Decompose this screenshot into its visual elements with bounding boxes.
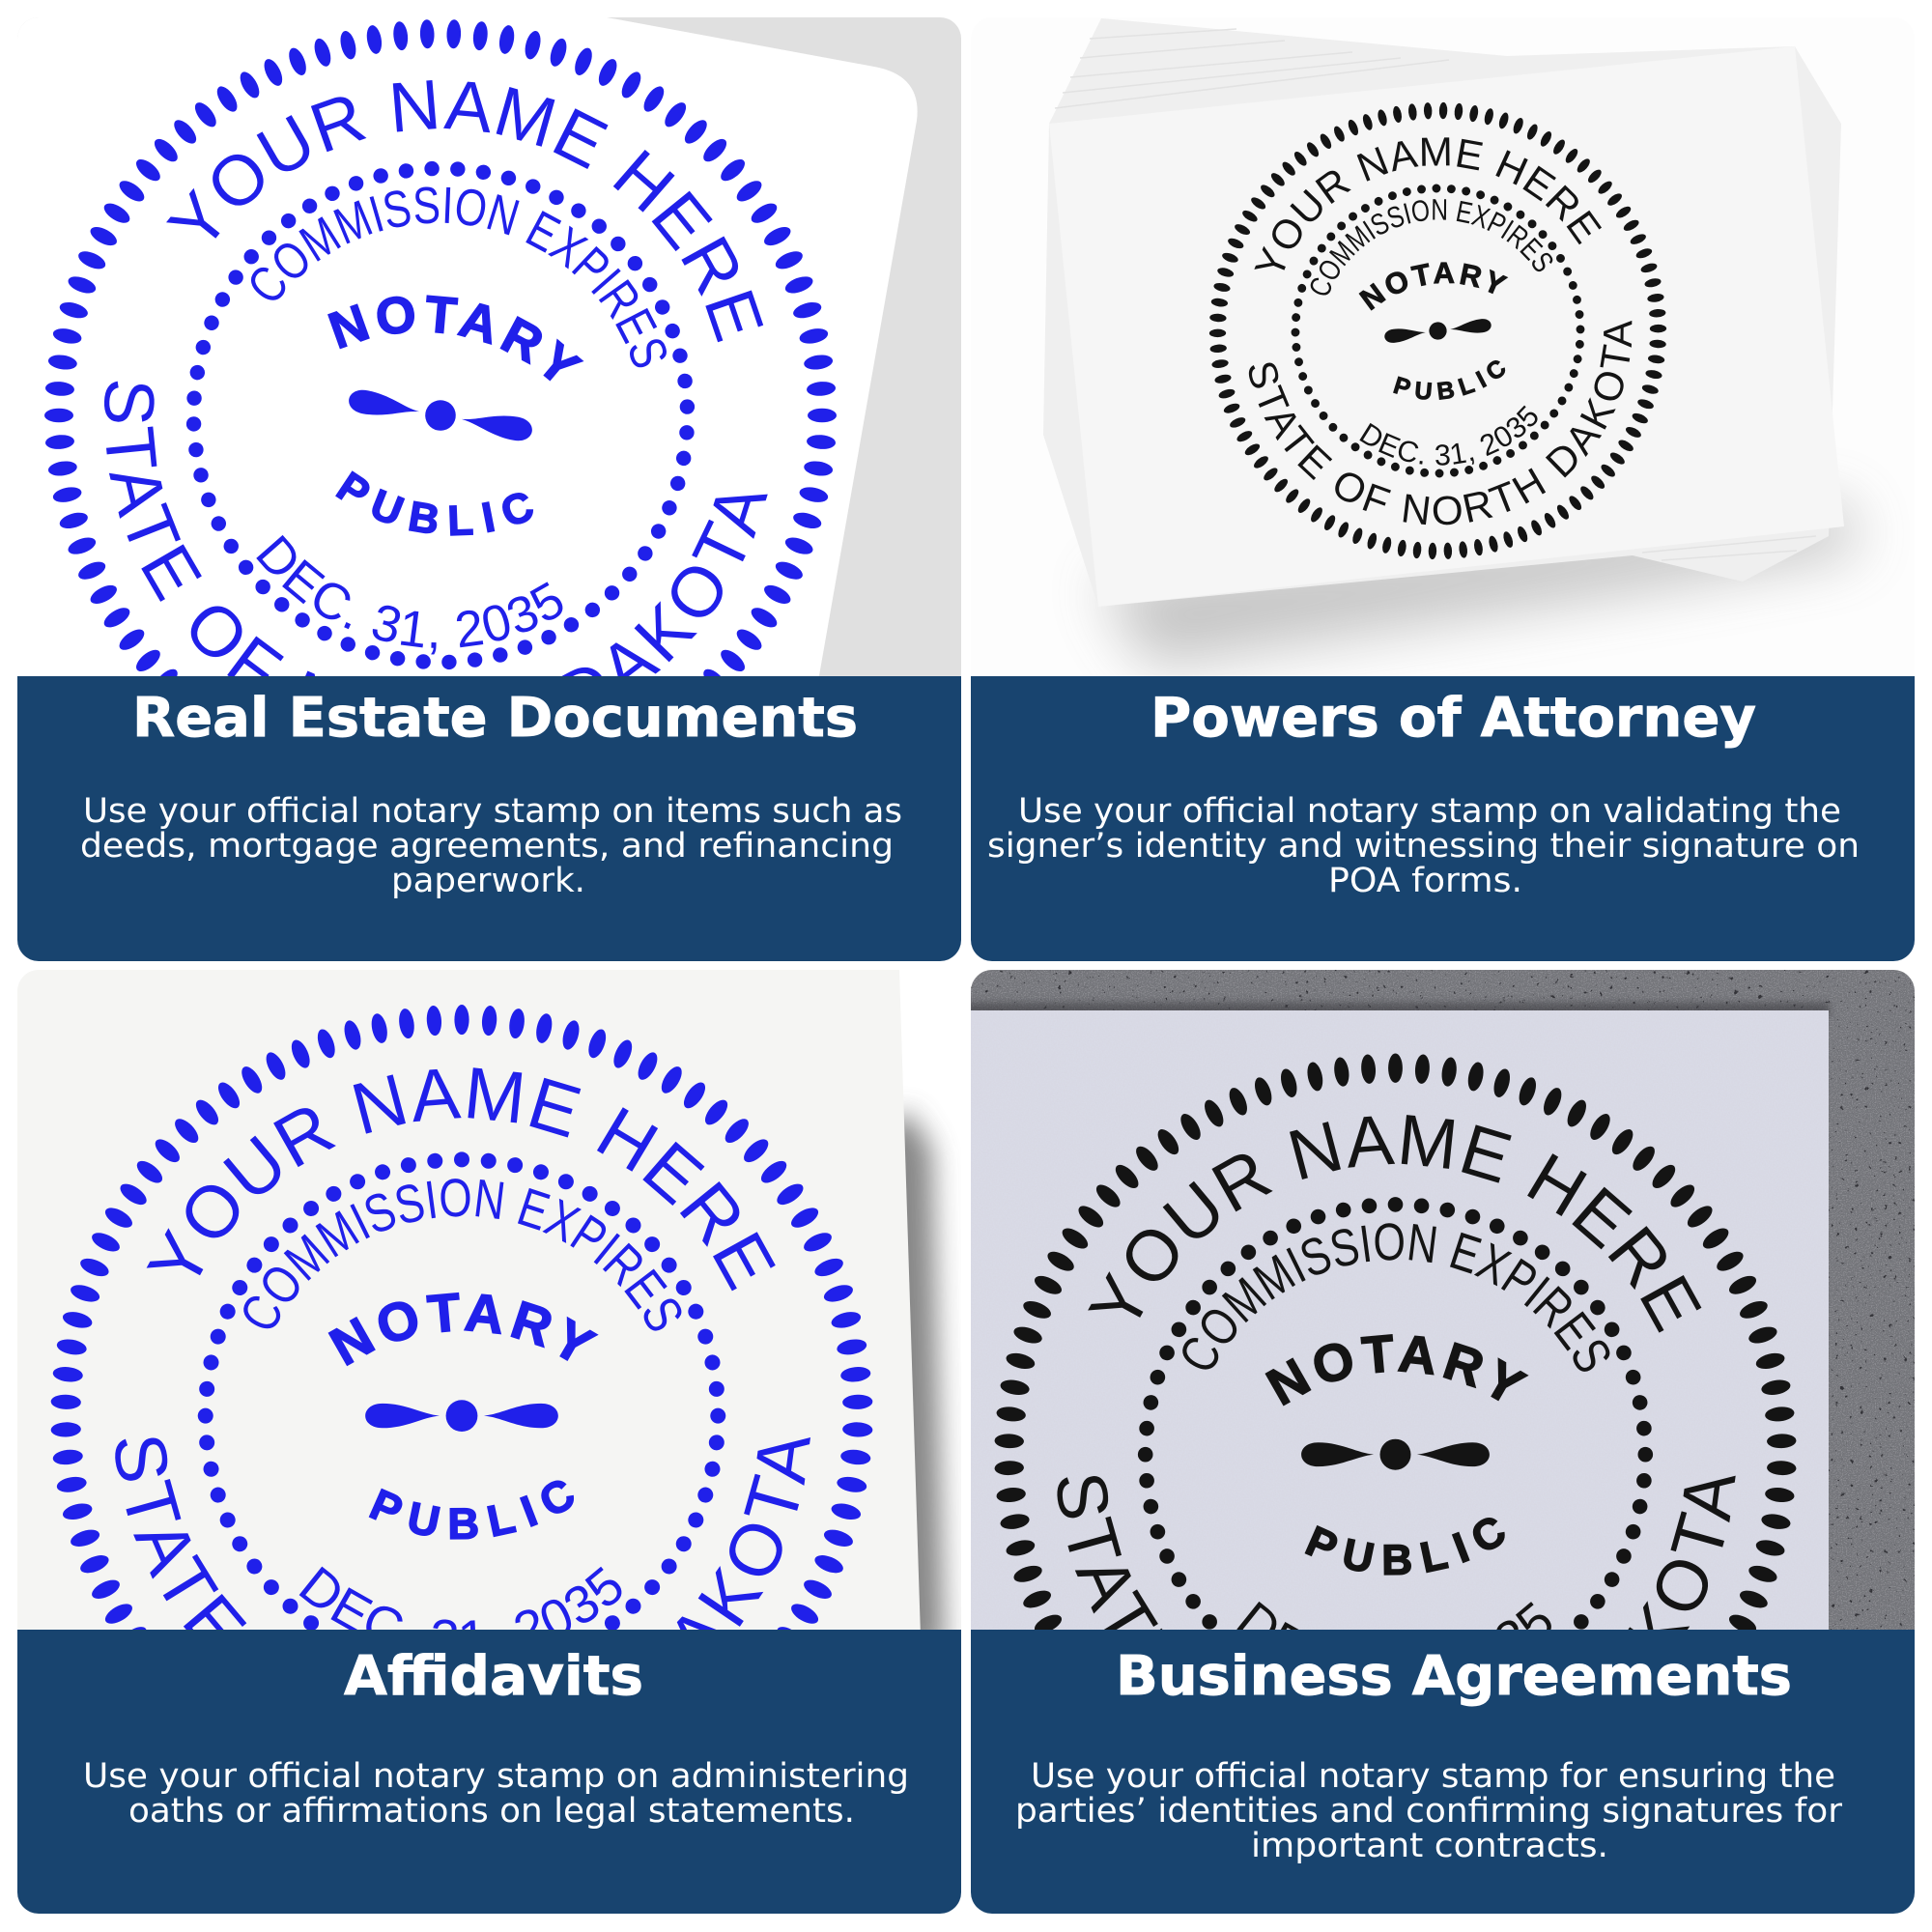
photo background: paper with side shadow (17, 970, 961, 1652)
description: important contracts. (1251, 1827, 1608, 1865)
heading: Real Estate Documents (132, 687, 858, 750)
notary stamp: black: NOTARY (1258, 1324, 1533, 1417)
notary stamp: black: STATE OF NORTH DAKOTA (1248, 321, 1633, 526)
notary stamp: blue: STATE OF NORTH DAKOTA (115, 1437, 810, 1630)
description: Use your official notary stamp on items such as (83, 792, 902, 831)
notary stamp: blue: STATE OF NORTH DAKOTA (104, 381, 768, 676)
notary stamp: black: COMMISSION EXPIRES (1310, 199, 1553, 296)
description: paperwork. (391, 862, 585, 900)
photo background: stack of white cards (1043, 18, 1879, 676)
heading: Affidavits (344, 1645, 643, 1708)
description: signer’s identity and witnessing their signature on (987, 827, 1860, 866)
notary stamp: blue: YOUR NAME HERE (147, 1067, 776, 1291)
notary stamp: blue: PUBLIC (335, 470, 533, 536)
heading: Business Agreements (1116, 1645, 1792, 1708)
notary stamp: blue: PUBLIC (369, 1480, 574, 1540)
description (1015, 1757, 1843, 1865)
notary stamp: black: PUBLIC (1299, 1507, 1514, 1584)
description: Use your official notary stamp on validating the (1018, 792, 1841, 831)
panel: powers of attorney (971, 18, 1915, 961)
notary stamp: blue: NOTARY (328, 1293, 599, 1366)
panel: affidavits (17, 970, 961, 1914)
notary stamp: black: NOTARY (1358, 262, 1509, 311)
notary stamp: blue: YOUR NAME HERE (166, 80, 763, 342)
description: parties’ identities and confirming signatures for (1015, 1792, 1843, 1831)
description: oaths or affirmations on legal statements. (128, 1792, 855, 1831)
notary stamp: black: PUBLIC (1393, 360, 1505, 400)
panel: business agreements (971, 970, 1915, 1914)
notary stamp: blue: COMMISSION EXPIRES (243, 1179, 682, 1331)
notary stamp: black (995, 1053, 1797, 1630)
notary stamp: black: YOUR NAME HERE (1254, 137, 1602, 270)
photo background: paper on concrete (966, 970, 1915, 1636)
caption panel: business agreements (971, 1630, 1915, 1914)
notary stamp: black (1209, 102, 1667, 560)
notary stamp: black: STATE OF NORTH DAKOTA (1057, 1476, 1736, 1630)
photo background: paper corner on grey (607, 17, 961, 676)
description: POA forms. (1328, 862, 1522, 900)
description (80, 792, 902, 900)
caption panel: real estate documents (17, 676, 961, 961)
notary stamp: blue: DEC. 31, 2035 (256, 535, 562, 655)
panel: real estate documents (17, 17, 961, 961)
notary stamp: black: YOUR NAME HERE (1088, 1115, 1702, 1333)
description: Use your official notary stamp on administering (83, 1757, 909, 1796)
description (989, 796, 1857, 893)
description: deeds, mortgage agreements, and refinancing (80, 827, 894, 866)
notary stamp: blue: COMMISSION EXPIRES (251, 187, 667, 367)
notary stamp: blue: DEC. 31, 2035 (299, 1567, 622, 1630)
notary stamp: black: DEC. 31, 2035 (1226, 1590, 1565, 1702)
notary stamp: black: DEC. 31, 2035 (1359, 406, 1538, 466)
notary stamp: black: COMMISSION EXPIRES (1167, 1212, 1624, 1382)
description (83, 1757, 909, 1831)
caption panel: affidavits (17, 1630, 961, 1914)
description: Use your official notary stamp for ensuring the (1031, 1757, 1835, 1796)
notary stamp: blue (50, 1005, 873, 1630)
caption panel: powers of attorney (971, 676, 1915, 961)
heading: Powers of Attorney (1151, 687, 1756, 750)
notary stamp: blue (44, 19, 837, 676)
notary stamp: blue: NOTARY (327, 295, 583, 381)
